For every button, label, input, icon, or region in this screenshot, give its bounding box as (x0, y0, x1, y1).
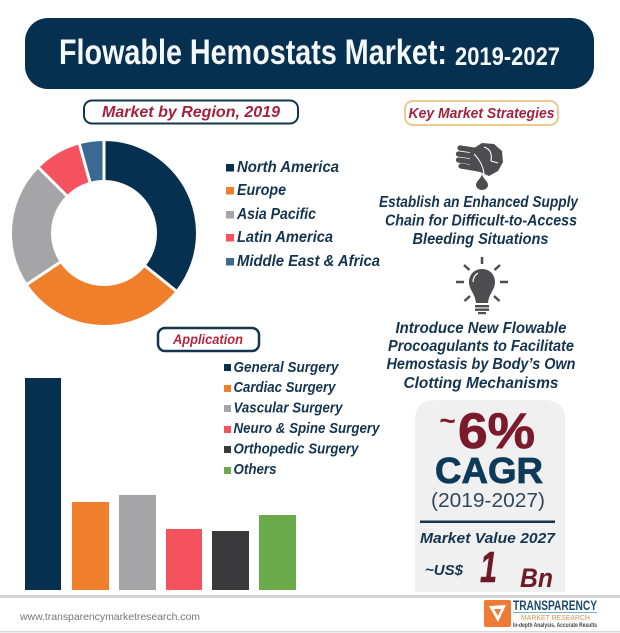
panel: CAGR and market value (415, 400, 565, 593)
footer url: www.transparencymarketresearch.com (19, 611, 200, 623)
legend: applications: Vascular Surgery (234, 400, 343, 416)
heading: application (158, 328, 259, 351)
strategy text 2: Clotting Mechanisms (404, 375, 559, 392)
legend: regions: Latin America (237, 229, 333, 246)
donut chart: market by region (23, 136, 180, 306)
market value label: Market Value 2027 (420, 531, 556, 547)
legend: applications: General Surgery (234, 359, 339, 376)
CAGR percentage: 6% (458, 403, 535, 459)
heading: application: Application (172, 331, 243, 347)
legend: regions: Asia Pacific (236, 206, 316, 223)
title banner: Flowable Hemostats Market: (59, 33, 447, 72)
strategy text 1: Chain for Difficult-to-Access (385, 212, 577, 230)
legend: applications: Others (234, 461, 276, 478)
currency prefix: ~US$ (425, 562, 464, 579)
logo: transparency market research (484, 598, 598, 629)
heading: key market strategies: Key Market Strategies (408, 105, 554, 122)
strategy text 2 (386, 320, 576, 392)
tilde: ~ (439, 405, 456, 436)
strategy text 1 (379, 194, 579, 248)
market value unit: Bn (520, 563, 553, 593)
market value number: 1 (480, 543, 497, 592)
strategy text 2: Hemostasis by Body’s Own (386, 356, 576, 373)
logo: transparency market research: In-depth Analysis. Accurate Results (513, 623, 598, 629)
strategy text 2: Introduce New Flowable (396, 320, 567, 337)
strategy text 1: Bleeding Situations (412, 231, 549, 248)
legend: regions (226, 159, 380, 270)
heading: market by region: Market by Region, 2019 (102, 104, 280, 121)
title banner: 2019-2027 (455, 43, 560, 71)
legend: applications: Cardiac Surgery (234, 379, 336, 396)
heading: key market strategies (405, 101, 558, 125)
legend: applications (224, 359, 380, 478)
footer rules (0, 595, 620, 632)
legend: regions: Europe (237, 182, 286, 199)
legend: applications: Neuro & Spine Surgery (234, 420, 380, 437)
legend: regions: North America (237, 159, 339, 176)
CAGR label: CAGR (435, 450, 543, 491)
strategy text 2: Procoagulants to Facilitate (388, 338, 574, 355)
legend: regions: Middle East & Africa (237, 253, 380, 270)
title banner (25, 18, 594, 89)
icon: bleeding hand (458, 143, 503, 190)
heading: market by region (84, 100, 298, 124)
logo: transparency market research: MARKET RESEARCH (521, 613, 590, 622)
bar chart: application (25, 378, 296, 590)
legend: applications: Orthopedic Surgery (234, 440, 359, 458)
strategy text 1: Establish an Enhanced Supply (379, 194, 579, 211)
icon: light bulb (456, 257, 508, 314)
CAGR period: (2019-2027) (431, 490, 545, 512)
